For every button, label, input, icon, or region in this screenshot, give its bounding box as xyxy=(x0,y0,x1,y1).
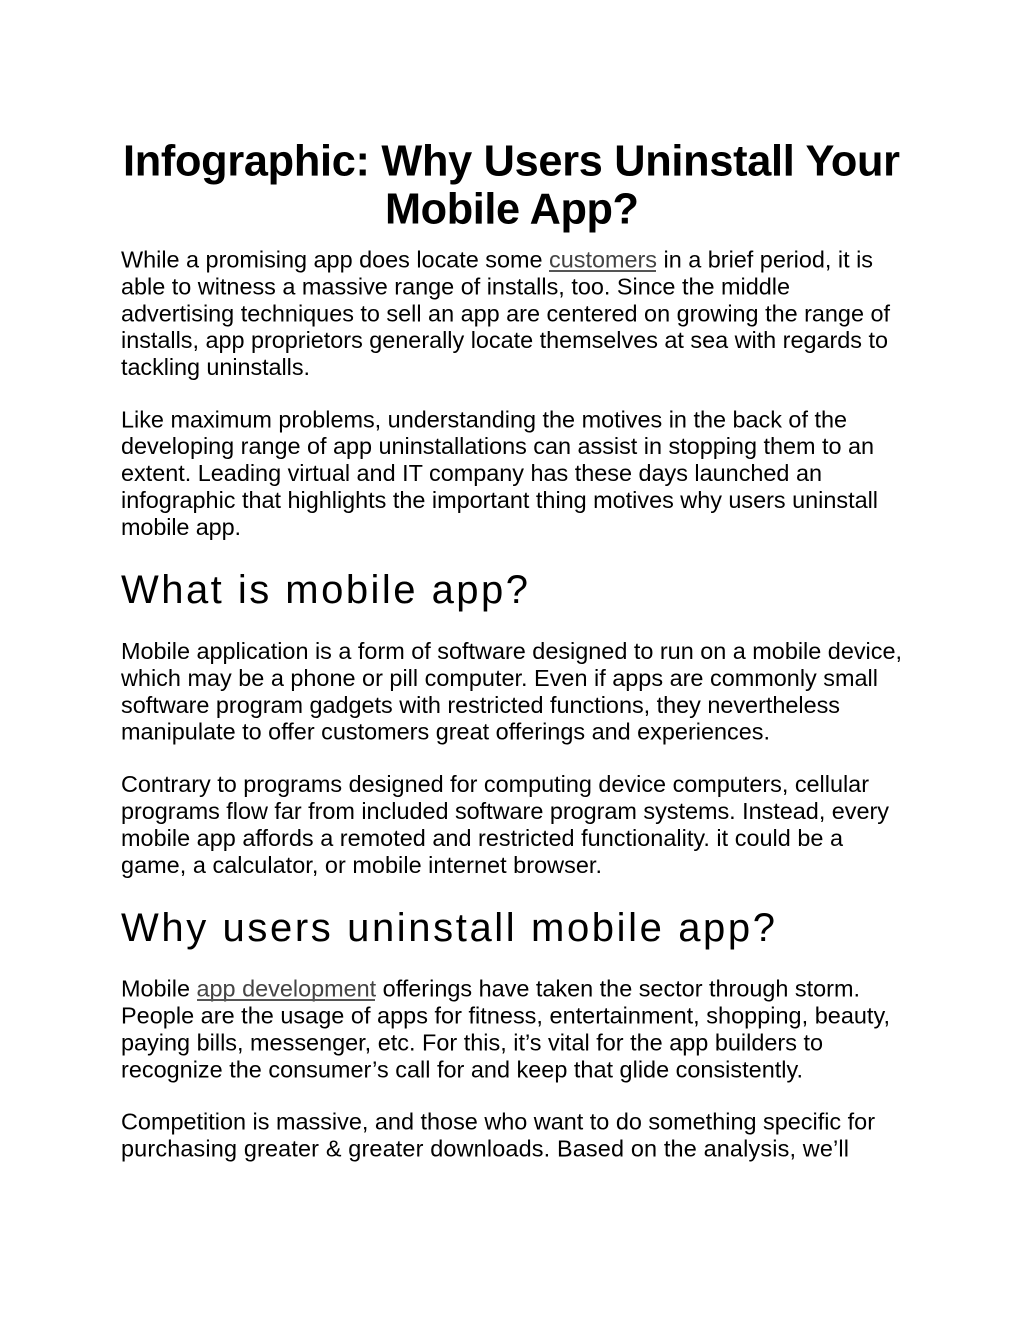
text block: mobile application definition: which may be a phone or pill computer. Even if apps are commonly small xyxy=(120,665,878,691)
text block: app development offerings xyxy=(121,976,890,1082)
text block: second paragraph: mobile app. xyxy=(121,514,241,540)
text block: contrary to programs: programs flow far from included software program systems. Instead, every xyxy=(121,798,889,824)
text block: contrary to programs: game, a calculator, or mobile internet browser. xyxy=(121,852,602,878)
heading: why users uninstall: Why users uninstall mobile app? xyxy=(121,906,775,950)
text block: mobile application definition: Mobile application is a form of software designed to run on a mobile device, xyxy=(121,638,902,664)
text block: competition paragraph: Competition is massive, and those who want to do something specific for xyxy=(121,1108,875,1134)
text block: app development offerings: paying bills, messenger, etc. For this, it’s vital for the app builders to xyxy=(121,1030,823,1056)
text block: second paragraph: Like maximum problems, understanding the motives in the back of the xyxy=(121,406,847,432)
title: Mobile App? xyxy=(385,186,639,234)
text block: app development offerings: recognize the consumer’s call for and keep that glide consistently. xyxy=(121,1056,803,1082)
text block: competition paragraph: purchasing greater & greater downloads. Based on the analysis, we’ll xyxy=(121,1136,849,1162)
text block: second paragraph: developing range of app uninstallations can assist in stopping them to an xyxy=(121,433,874,459)
text block: mobile application definition: manipulate to offer customers great offerings and experiences. xyxy=(121,718,770,744)
title xyxy=(123,138,900,234)
text block: intro paragraph: tackling uninstalls. xyxy=(121,354,310,380)
text block: second paragraph xyxy=(121,406,878,540)
text block: intro paragraph xyxy=(121,246,890,380)
text block: second paragraph: infographic that highlights the important thing motives why users uninstall xyxy=(121,487,878,513)
text block: contrary to programs xyxy=(121,771,889,878)
text block: app development offerings: People are the usage of apps for fitness, entertainment, shopping, beauty, xyxy=(121,1002,890,1028)
text block: intro paragraph: installs, app proprietors generally locate themselves at sea with regards to xyxy=(121,327,888,353)
text block: mobile application definition xyxy=(120,638,902,744)
text block: contrary to programs: mobile app affords a remoted and restricted functionality. it could be a xyxy=(121,825,844,851)
title: Infographic: Why Users Uninstall Your xyxy=(123,138,900,186)
text block: contrary to programs: Contrary to programs designed for computing device computers, cellular xyxy=(121,771,869,797)
text block: intro paragraph: advertising techniques to sell an app are centered on growing the range of xyxy=(121,300,890,326)
text block: intro paragraph: able to witness a massive range of installs, too. Since the middle xyxy=(121,274,790,300)
text block: second paragraph: extent. Leading virtual and IT company has these days launched an xyxy=(121,460,822,486)
heading: what is mobile app: What is mobile app? xyxy=(121,568,528,612)
text block: mobile application definition: software program gadgets with restricted functions, they nevertheless xyxy=(121,692,840,718)
text block: intro paragraph: While a promising app does locate some customers in a brief period, it is xyxy=(121,246,873,272)
text block: app development offerings: Mobile app development offerings have taken the sector through storm. xyxy=(121,976,860,1002)
text block: competition paragraph xyxy=(121,1108,875,1162)
